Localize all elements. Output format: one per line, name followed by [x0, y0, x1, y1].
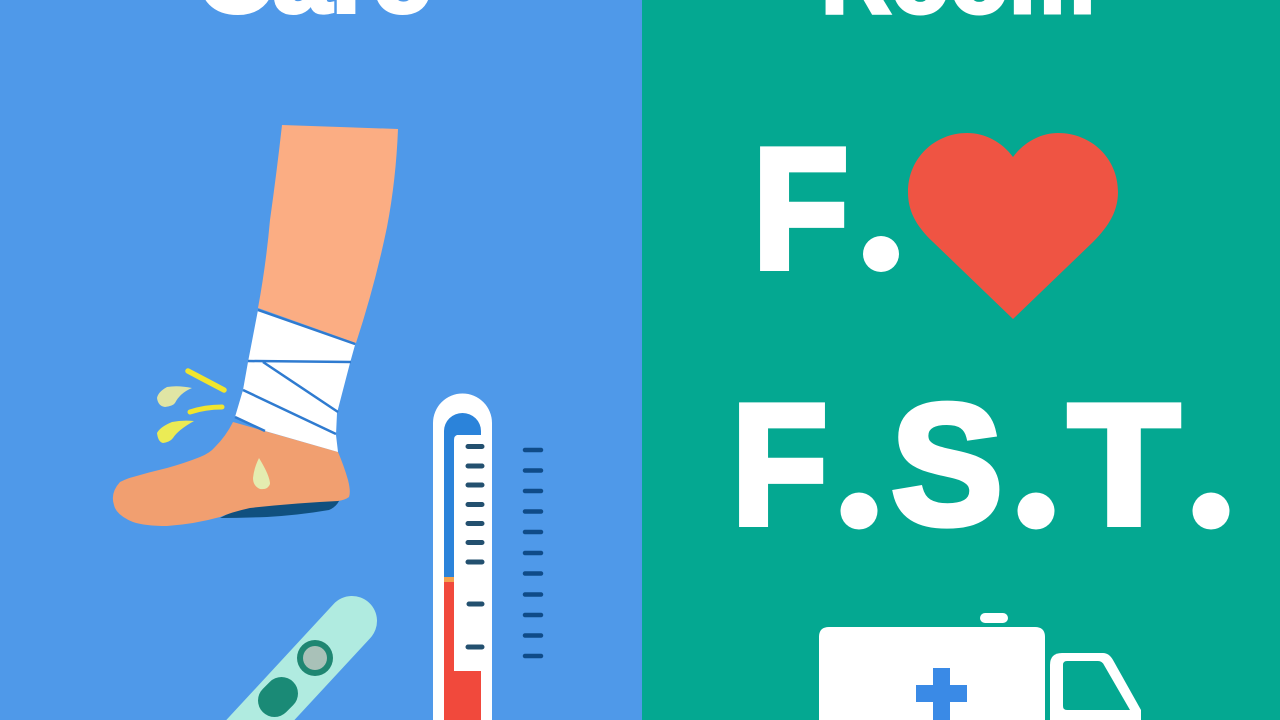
letter F: F: [753, 114, 848, 304]
round pad: [297, 640, 333, 676]
panel: emergency room background: [642, 0, 1280, 720]
mid level: [444, 577, 454, 582]
pad center: [303, 646, 327, 670]
letter F with dot and heart: [753, 114, 1118, 319]
capsule pad: [274, 694, 282, 700]
letter S: S: [892, 370, 1002, 560]
foot: [113, 422, 350, 526]
medical cross: [916, 668, 967, 720]
bandage wrap: [235, 310, 355, 452]
icon: ambulance: [819, 613, 1141, 720]
icon: bandaged foot: [113, 125, 398, 526]
letter F: F: [732, 370, 828, 560]
sole shadow: [220, 498, 339, 518]
dot: [1018, 492, 1054, 530]
thermometer inner ticks: [468, 446, 482, 647]
pain marks: [157, 371, 224, 443]
outer scale ticks: [525, 450, 541, 656]
ambulance body: [819, 627, 1045, 720]
blister: [253, 458, 270, 489]
thermometer body: [433, 394, 492, 720]
panel: home care background: [0, 0, 642, 720]
cab window: [1063, 661, 1130, 710]
cab: [1050, 653, 1141, 720]
icon: thermometer: [433, 394, 541, 720]
dot: [1192, 492, 1230, 530]
dot: [863, 236, 899, 272]
letter T: T: [1068, 370, 1180, 560]
dot: [840, 492, 878, 530]
cold fluid: [444, 413, 481, 577]
icon: adhesive bandage: [240, 621, 352, 720]
roof light: [980, 613, 1008, 623]
acronym F.S.T.: [732, 370, 1230, 560]
hot fluid: [444, 582, 481, 720]
leg: [258, 125, 398, 343]
icon: heart: [908, 133, 1118, 319]
bandage strip: [240, 621, 352, 720]
